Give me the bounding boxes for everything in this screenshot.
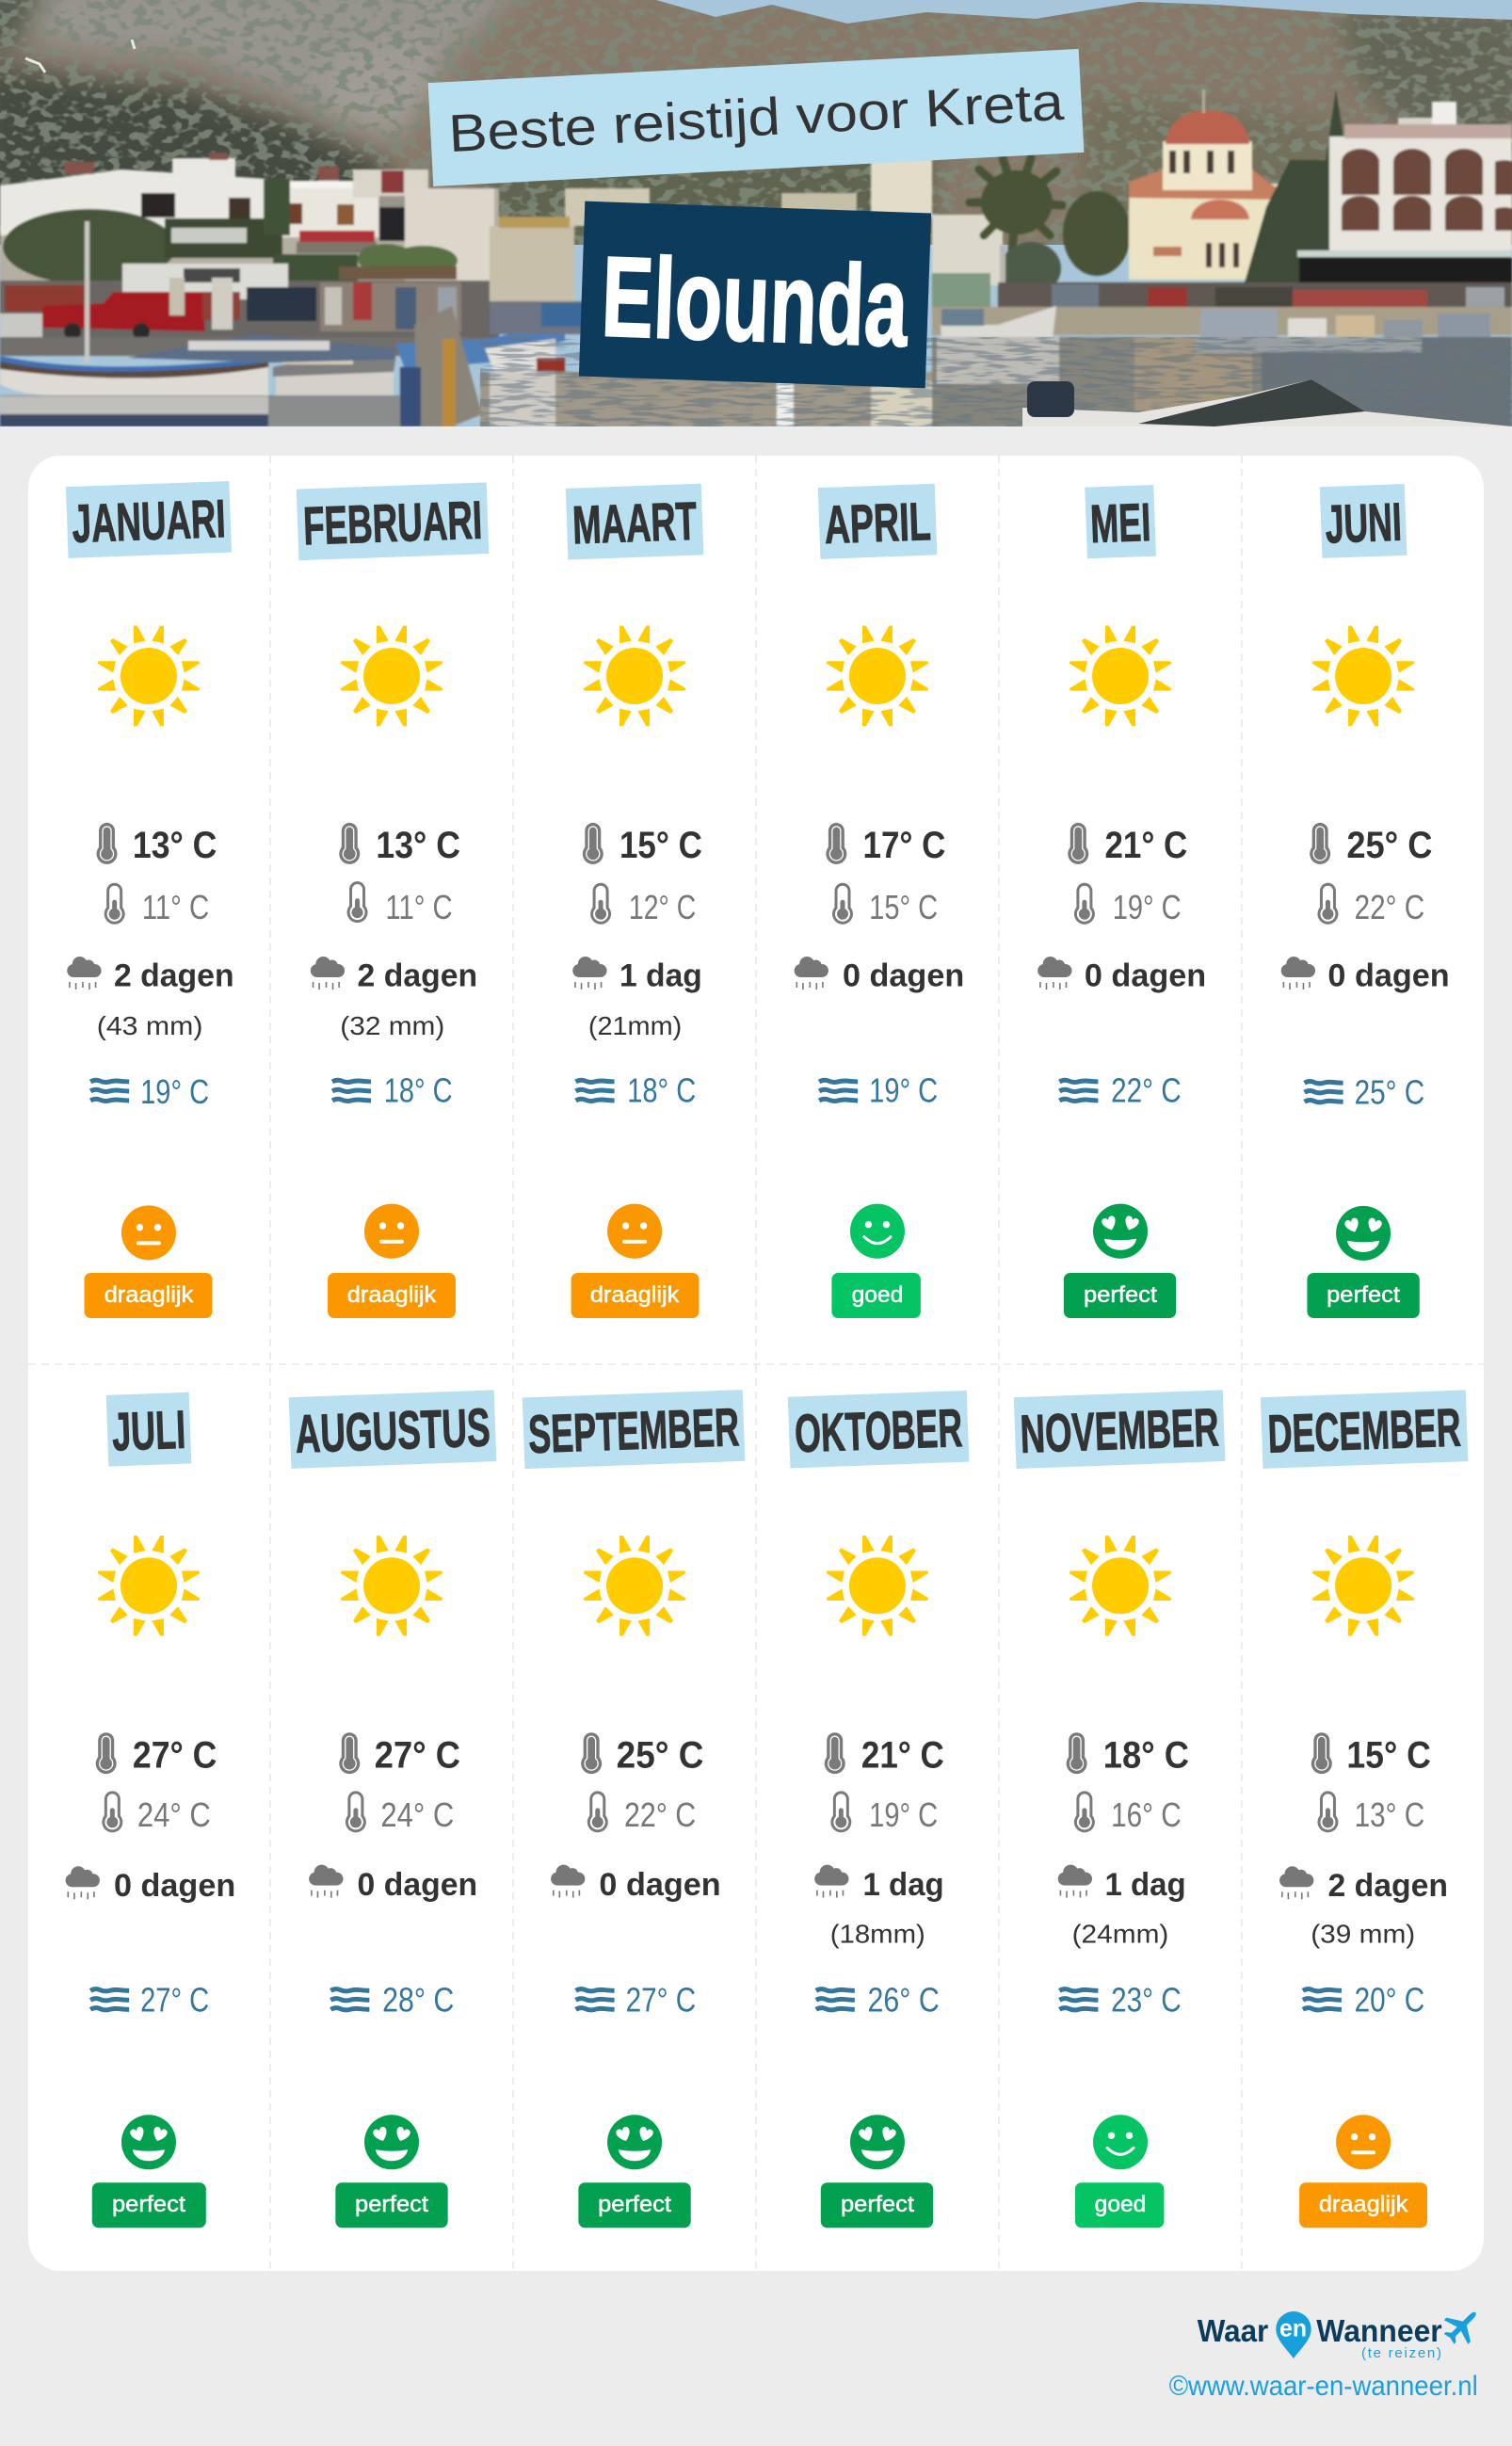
- month label: [523, 1390, 745, 1469]
- logo word: Wanneer: Wanneer: [1316, 2313, 1442, 2348]
- rating face: [121, 2115, 176, 2169]
- panel: november: [1014, 1390, 1225, 2228]
- rainfall: (21mm): [588, 1011, 682, 1040]
- rating badge: [578, 2182, 691, 2228]
- fishing boats: [0, 365, 269, 396]
- icon: rain: [1058, 1865, 1092, 1898]
- gulls: [25, 40, 135, 72]
- low temperature: 13° C: [1355, 1795, 1424, 1834]
- icon: sun: [827, 1536, 928, 1636]
- rating badge: draaglijk: [105, 1282, 194, 1308]
- rating face: [121, 1205, 176, 1260]
- rain days: 0 dagen: [843, 958, 964, 994]
- sea temperature: 18° C: [627, 1071, 696, 1110]
- month label: MAART: [571, 491, 698, 555]
- high temperature: 21° C: [861, 1734, 944, 1776]
- sea temperature: 27° C: [140, 1980, 209, 2019]
- month label: [1085, 485, 1156, 558]
- icon: rain: [814, 1865, 848, 1898]
- icon: sun: [584, 1536, 685, 1636]
- panel: januari: [66, 481, 234, 1318]
- high temperature: 27° C: [375, 1734, 460, 1776]
- sea temperature: 23° C: [1111, 1980, 1182, 2019]
- icon: low temperature: [1317, 883, 1338, 925]
- rating face: [850, 2115, 905, 2169]
- rain days: 2 dagen: [1327, 1868, 1448, 1904]
- rating badge: [92, 2182, 206, 2228]
- icon: high temperature: [97, 823, 118, 864]
- month label: JULI: [111, 1400, 186, 1462]
- rating face: [364, 2115, 419, 2169]
- hotel: [1329, 137, 1512, 254]
- icon: low temperature: [1074, 1791, 1095, 1832]
- panel: juli: [66, 1392, 235, 2228]
- low temperature: 22° C: [1355, 888, 1424, 926]
- rating badge: perfect: [841, 2192, 914, 2217]
- icon: high temperature: [1068, 823, 1088, 864]
- icon: sea: [1059, 1080, 1098, 1101]
- icon: low temperature: [102, 1791, 122, 1832]
- icon: rain: [66, 1866, 100, 1899]
- high temperature: 13° C: [133, 825, 217, 866]
- icon: sun: [1070, 1536, 1171, 1636]
- icon: sea: [576, 1989, 615, 2010]
- icon: high temperature: [583, 823, 603, 864]
- icon: rain: [1281, 957, 1315, 990]
- month label: [66, 481, 232, 558]
- panel: september: [523, 1390, 745, 2228]
- location banner: Elounda: [579, 201, 931, 388]
- palm trees: [932, 215, 1003, 285]
- rating badge: draaglijk: [347, 1282, 437, 1308]
- left white buildings: [0, 186, 501, 282]
- icon: rain: [309, 1865, 343, 1898]
- high temperature: 25° C: [1346, 825, 1432, 866]
- panel: mei: [1037, 485, 1206, 1318]
- rating badge: draaglijk: [1319, 2192, 1408, 2217]
- icon: sea: [816, 1989, 855, 2010]
- rain days: 0 dagen: [1085, 958, 1206, 994]
- rating badge: [831, 1273, 921, 1318]
- rating badge: [821, 2182, 933, 2228]
- rain days: 0 dagen: [1327, 958, 1450, 994]
- month label: MEI: [1089, 492, 1151, 555]
- sea temperature: 28° C: [382, 1980, 454, 2019]
- sea temperature: 27° C: [626, 1980, 696, 2019]
- month label: FEBRUARI: [302, 491, 483, 556]
- rain days: 0 dagen: [114, 1868, 235, 1904]
- icon: sun: [827, 626, 928, 726]
- icon: sea: [1059, 1989, 1098, 2010]
- rain days: 0 dagen: [599, 1867, 721, 1903]
- icon: sea: [90, 1080, 129, 1101]
- month label: AUGUSTUS: [295, 1397, 491, 1465]
- month label: JUNI: [1325, 492, 1403, 555]
- month label: [106, 1392, 191, 1467]
- icon: low temperature: [347, 881, 368, 923]
- rating face: [1336, 1206, 1391, 1261]
- low temperature: 24° C: [380, 1795, 454, 1834]
- icon: sun: [584, 626, 685, 726]
- icon: sun: [341, 1536, 442, 1636]
- rating badge: perfect: [598, 2192, 671, 2217]
- icon: high temperature: [581, 1732, 602, 1774]
- pavilion: [1298, 256, 1512, 284]
- month label: [297, 482, 489, 560]
- logo tagline: (te reizen): [1361, 2345, 1441, 2361]
- icon: sea: [330, 1989, 369, 2010]
- rating badge: [1299, 2182, 1427, 2228]
- left trees: [3, 209, 176, 284]
- rating face: [607, 1204, 662, 1259]
- panel: oktober: [788, 1391, 969, 2228]
- rating badge: [1064, 1273, 1176, 1318]
- month label: [1320, 484, 1407, 558]
- panel: augustus: [289, 1390, 496, 2228]
- motor boat: [1022, 379, 1512, 426]
- rating face: [1093, 1204, 1148, 1259]
- rain days: 1 dag: [863, 1867, 944, 1903]
- rainfall: (32 mm): [340, 1011, 444, 1040]
- icon: low temperature: [830, 1791, 851, 1832]
- icon: rain: [1037, 957, 1071, 990]
- icon: low temperature: [587, 1791, 608, 1832]
- high temperature: 13° C: [376, 825, 460, 866]
- month label: [788, 1391, 969, 1468]
- rating badge: perfect: [355, 2192, 428, 2217]
- rating face: [1336, 2115, 1391, 2169]
- rating face: [1093, 2115, 1148, 2169]
- icon: sea: [332, 1080, 371, 1101]
- rainfall: (43 mm): [97, 1011, 202, 1040]
- title banner: [428, 49, 1084, 186]
- rating badge: [84, 1273, 212, 1318]
- icon: sea: [576, 1080, 615, 1101]
- sea temperature: 26° C: [868, 1980, 940, 2019]
- icon: high temperature: [96, 1732, 117, 1774]
- low temperature: 12° C: [629, 888, 696, 926]
- rating badge: perfect: [112, 2192, 185, 2217]
- rating badge: [571, 1273, 700, 1318]
- sea temperature: 19° C: [869, 1071, 938, 1110]
- icon: sun: [1070, 626, 1171, 726]
- rainfall: (39 mm): [1311, 1919, 1415, 1948]
- icon: sun: [1312, 626, 1414, 726]
- icon: sea: [90, 1989, 129, 2010]
- mid buildings: [490, 226, 574, 301]
- rating badge: [1075, 2182, 1164, 2228]
- sea temperature: 20° C: [1355, 1980, 1424, 2019]
- icon: plane: [1437, 2300, 1488, 2351]
- card background: [28, 456, 1484, 2271]
- icon: high temperature: [339, 1732, 360, 1774]
- rating badge: perfect: [1084, 1282, 1157, 1308]
- low temperature: 16° C: [1111, 1795, 1182, 1834]
- icon: low temperature: [346, 1791, 366, 1832]
- icon: rain: [311, 957, 345, 990]
- icon: high temperature: [826, 823, 846, 864]
- high temperature: 27° C: [133, 1734, 217, 1776]
- panel: februari: [297, 482, 489, 1318]
- icon: high temperature: [825, 1732, 845, 1774]
- high temperature: 25° C: [617, 1734, 703, 1776]
- sea temperature: 25° C: [1355, 1073, 1424, 1112]
- high temperature: 15° C: [1346, 1734, 1431, 1776]
- low temperature: 11° C: [142, 888, 209, 926]
- rainfall: (18mm): [830, 1919, 925, 1948]
- month label: [566, 484, 703, 559]
- rating face: [364, 1204, 419, 1259]
- icon: sun: [98, 626, 200, 726]
- rain days: 2 dagen: [114, 958, 234, 994]
- icon: low temperature: [1317, 1791, 1338, 1832]
- rating badge: [328, 1273, 456, 1318]
- icon: high temperature: [1067, 1732, 1087, 1774]
- logo word: Waar: Waar: [1198, 2313, 1268, 2348]
- harbour boats: [941, 306, 1056, 341]
- low temperature: 15° C: [869, 888, 938, 926]
- rainfall: (24mm): [1072, 1919, 1168, 1948]
- panel: maart: [566, 484, 703, 1318]
- rating badge: draaglijk: [590, 1282, 680, 1308]
- right water: [930, 335, 1263, 426]
- crowd: [320, 282, 461, 331]
- icon: location pin: en: [1279, 2314, 1307, 2342]
- quay wall: [932, 307, 1512, 335]
- icon: sea: [819, 1080, 858, 1101]
- icon: high temperature: [339, 823, 360, 864]
- low temperature: 19° C: [869, 1795, 938, 1834]
- icon: sun: [98, 1536, 200, 1636]
- icon: sun: [341, 626, 442, 726]
- month label: JANUARI: [71, 489, 227, 555]
- high temperature: 15° C: [619, 825, 702, 866]
- rain days: 1 dag: [619, 958, 702, 994]
- net and mast: [414, 306, 482, 426]
- rating badge: goed: [1095, 2192, 1146, 2217]
- icon: low temperature: [105, 883, 125, 925]
- logo: Waar en Wanneer: [1198, 2300, 1488, 2361]
- panel: april: [795, 484, 964, 1318]
- cypress trees: [1245, 89, 1348, 282]
- sea temperature: 22° C: [1111, 1071, 1182, 1110]
- location banner: Elounda: Elounda: [600, 232, 911, 371]
- rain days: 1 dag: [1104, 1867, 1186, 1903]
- month label: NOVEMBER: [1020, 1397, 1220, 1465]
- rating badge: perfect: [1327, 1282, 1400, 1308]
- red truck: [5, 285, 85, 312]
- weather grid: [66, 481, 1468, 2228]
- icon: sea: [1305, 1082, 1343, 1102]
- icon: low temperature: [1074, 883, 1095, 925]
- icon: sea: [1303, 1989, 1342, 2010]
- low temperature: 22° C: [624, 1795, 696, 1834]
- rating badge: [1307, 1273, 1420, 1318]
- title banner: Beste reistijd voor Kreta: [447, 72, 1066, 163]
- hero photo: Elounda harbour: [0, 0, 1512, 426]
- icon: rain: [67, 957, 102, 990]
- icon: low temperature: [590, 883, 611, 925]
- rating face: [607, 2115, 662, 2169]
- month label: [818, 484, 937, 559]
- rain days: 2 dagen: [358, 958, 477, 994]
- parked cars: [998, 282, 1512, 309]
- low temperature: 19° C: [1113, 888, 1182, 926]
- month label: OKTOBER: [794, 1398, 963, 1464]
- rating face: [850, 1204, 905, 1259]
- middle water: [480, 372, 932, 426]
- icon: rain: [551, 1865, 585, 1898]
- month label: [289, 1390, 496, 1469]
- high temperature: 21° C: [1104, 825, 1187, 866]
- icon: low temperature: [832, 883, 853, 925]
- rating badge: goed: [852, 1282, 903, 1308]
- icon: high temperature: [1311, 1732, 1332, 1774]
- church: [1129, 184, 1283, 280]
- icon: rain: [1279, 1866, 1313, 1899]
- left water: [0, 394, 401, 399]
- low temperature: 24° C: [137, 1795, 211, 1834]
- icon: rain: [572, 957, 607, 990]
- high temperature: 18° C: [1103, 1734, 1189, 1776]
- icon: sun: [1312, 1536, 1414, 1636]
- website credit: ©www.waar-en-wanneer.nl: [1169, 2371, 1478, 2402]
- sea temperature: 18° C: [384, 1071, 453, 1110]
- month label: SEPTEMBER: [527, 1397, 740, 1465]
- icon: rain: [795, 957, 828, 990]
- high temperature: 17° C: [863, 825, 945, 866]
- month label: [1014, 1390, 1225, 1469]
- month label: APRIL: [824, 491, 932, 555]
- panel: juni: [1281, 484, 1450, 1318]
- sea temperature: 19° C: [140, 1072, 209, 1111]
- rain days: 0 dagen: [358, 1867, 477, 1903]
- icon: location pin: [1276, 2311, 1311, 2358]
- icon: high temperature: [1310, 823, 1330, 864]
- panel: december: [1261, 1390, 1468, 2228]
- low temperature: 11° C: [385, 888, 453, 926]
- rating badge: [335, 2182, 448, 2228]
